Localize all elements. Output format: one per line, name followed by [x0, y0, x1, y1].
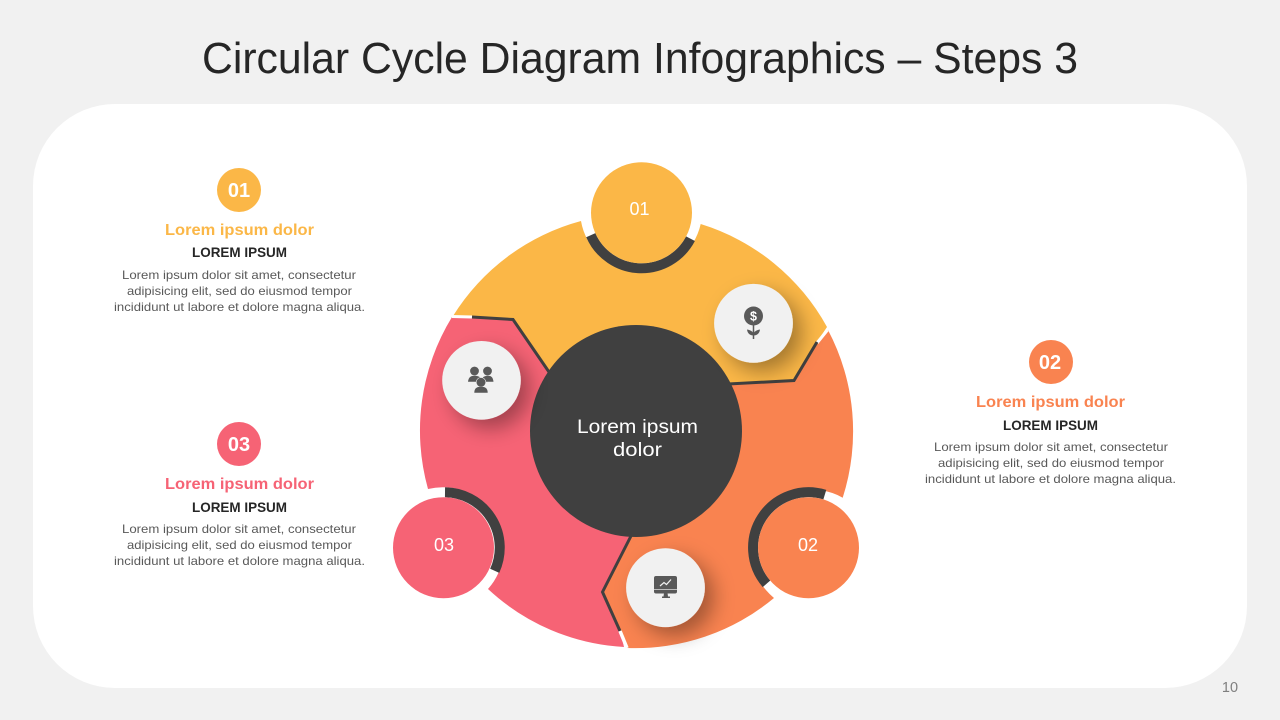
- center circle: [530, 325, 742, 537]
- body: step 02: Lorem ipsum dolor sit amet, consectetur: [934, 440, 1168, 454]
- body: step 03: Lorem ipsum dolor sit amet, consectetur: [122, 522, 356, 536]
- arc: ring 02: [753, 492, 825, 584]
- body: step 02: incididunt ut labore et dolore magna aliqua.: [925, 472, 1176, 486]
- icon: money plant: $: [750, 310, 757, 324]
- divider: pink and orange: [602, 536, 631, 648]
- body: step 03: [114, 522, 365, 568]
- body: step 01: incididunt ut labore et dolore magna aliqua.: [114, 300, 365, 314]
- badge: 02: 02: [1039, 352, 1061, 374]
- arc: ring 03: [445, 492, 500, 571]
- body: step 02: [925, 440, 1176, 486]
- node: 02: 02: [798, 535, 818, 555]
- node: 01: 01: [629, 199, 650, 219]
- panel: main white card: [33, 104, 1247, 688]
- heading: step 01: Lorem ipsum dolor: [165, 222, 314, 239]
- segment: orange 02: [603, 330, 853, 648]
- divider: yellow and pink: [452, 316, 549, 372]
- node: 01: [591, 162, 692, 263]
- heading: step 02: Lorem ipsum dolor: [976, 394, 1125, 411]
- node: 03: [393, 497, 494, 598]
- text block: step 01: [114, 168, 365, 314]
- arc: ring 01: [591, 235, 690, 268]
- badge: 01: 01: [228, 180, 250, 202]
- icon: people group: [442, 341, 521, 420]
- text block: step 03: [114, 422, 365, 568]
- subheading: step 01: LOREM IPSUM: [192, 244, 287, 260]
- subheading: step 03: LOREM IPSUM: [192, 499, 287, 515]
- title: Circular Cycle Diagram Infographics – Steps 3: [202, 34, 1078, 83]
- icon: money plant: [714, 284, 793, 363]
- body: step 02: adipisicing elit, sed do eiusmod tempor: [938, 456, 1164, 470]
- node: 02: [758, 497, 859, 598]
- body: step 01: Lorem ipsum dolor sit amet, consectetur: [122, 268, 356, 282]
- text block: step 02: [925, 340, 1176, 486]
- badge: 01: [217, 168, 261, 212]
- subheading: step 02: LOREM IPSUM: [1003, 417, 1098, 433]
- center circle: dolor: [613, 440, 663, 461]
- segment: yellow 01: [453, 221, 827, 431]
- center circle: Lorem ipsum: [577, 417, 698, 438]
- body: step 03: incididunt ut labore et dolore magna aliqua.: [114, 554, 365, 568]
- body: step 01: [114, 268, 365, 314]
- body: step 03: adipisicing elit, sed do eiusmod tempor: [127, 538, 352, 552]
- chart: circular cycle diagram: [393, 162, 859, 648]
- body: step 01: adipisicing elit, sed do eiusmod tempor: [127, 284, 352, 298]
- icon: computer chart: [626, 548, 705, 627]
- badge: 02: [1029, 340, 1073, 384]
- divider: yellow and orange: [728, 330, 828, 384]
- node: 03: 03: [434, 535, 454, 555]
- badge: 03: [217, 422, 261, 466]
- page number: 10: [1222, 680, 1238, 696]
- segment: pink 03: [420, 317, 636, 647]
- badge: 03: 03: [228, 434, 250, 456]
- heading: step 03: Lorem ipsum dolor: [165, 476, 314, 493]
